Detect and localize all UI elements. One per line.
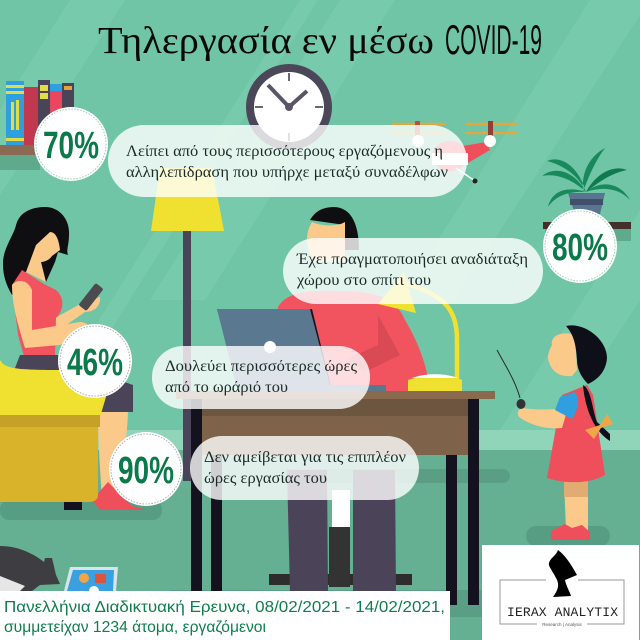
title: Τηλεργασία εν μέσω	[98, 20, 434, 62]
girl with remote control	[497, 325, 613, 540]
survey source note: συμμετείχαν 1234 άτομα, εργαζόμενοι	[4, 619, 266, 636]
logo: Ierax Analytix: Research | Analysis	[542, 622, 582, 627]
callout: 70 percent: Λείπει από τους περισσότερους εργαζόμενους η	[126, 143, 443, 160]
icon: potted plant on shelf	[542, 148, 631, 241]
callout: 70 percent: αλληλεπίδραση που υπήρχε μεταξύ συναδέλφων	[126, 164, 448, 181]
callout: 80 percent	[283, 238, 543, 304]
icon: tablet	[64, 567, 118, 596]
callout: 90 percent: Δεν αμείβεται για τις επιπλέον	[204, 449, 406, 466]
callout: 90 percent	[190, 436, 419, 500]
stat badge: 80%: 80%	[552, 227, 608, 269]
stat badge: 70%	[34, 107, 108, 181]
survey source note	[0, 591, 450, 640]
stat badge: 90%: 90%	[118, 450, 174, 492]
desk with lamp	[176, 272, 495, 605]
logo: Ierax Analytix: IERAX ANALYTIX	[507, 605, 618, 620]
floor lamp	[151, 168, 224, 481]
callout: 70 percent	[108, 125, 467, 197]
man at desk with laptop	[217, 207, 430, 591]
cat	[0, 546, 60, 591]
callout: 80 percent: χώρου στο σπίτι του	[296, 272, 431, 289]
stat badge: 90%	[109, 432, 183, 506]
callout: 46 percent: από το ωράριό του	[165, 379, 288, 396]
callout: 90 percent: ώρες εργασίας του	[204, 470, 327, 487]
stat badge: 70%: 70%	[43, 125, 99, 167]
stat badge: 80%	[543, 209, 617, 283]
callout: 46 percent	[152, 346, 370, 409]
woman on sofa with phone	[0, 207, 147, 510]
title	[98, 16, 542, 63]
callout: 80 percent: Έχει πραγματοποιήσει αναδιάταξη	[296, 251, 528, 268]
title: COVID-19	[445, 16, 542, 63]
stat badge: 46%	[58, 324, 132, 398]
icon: wall clock	[246, 64, 332, 150]
icon: drone	[392, 121, 518, 184]
callout: 46 percent: Δουλεύει περισσότερες ώρες	[165, 358, 358, 375]
icon: books on shelf	[0, 80, 74, 170]
logo: Ierax Analytix	[482, 545, 639, 640]
survey source note: Πανελλήνια Διαδικτυακή Ερευνα, 08/02/2021 - 14/02/2021,	[4, 599, 445, 616]
stat badge: 46%: 46%	[67, 342, 123, 384]
